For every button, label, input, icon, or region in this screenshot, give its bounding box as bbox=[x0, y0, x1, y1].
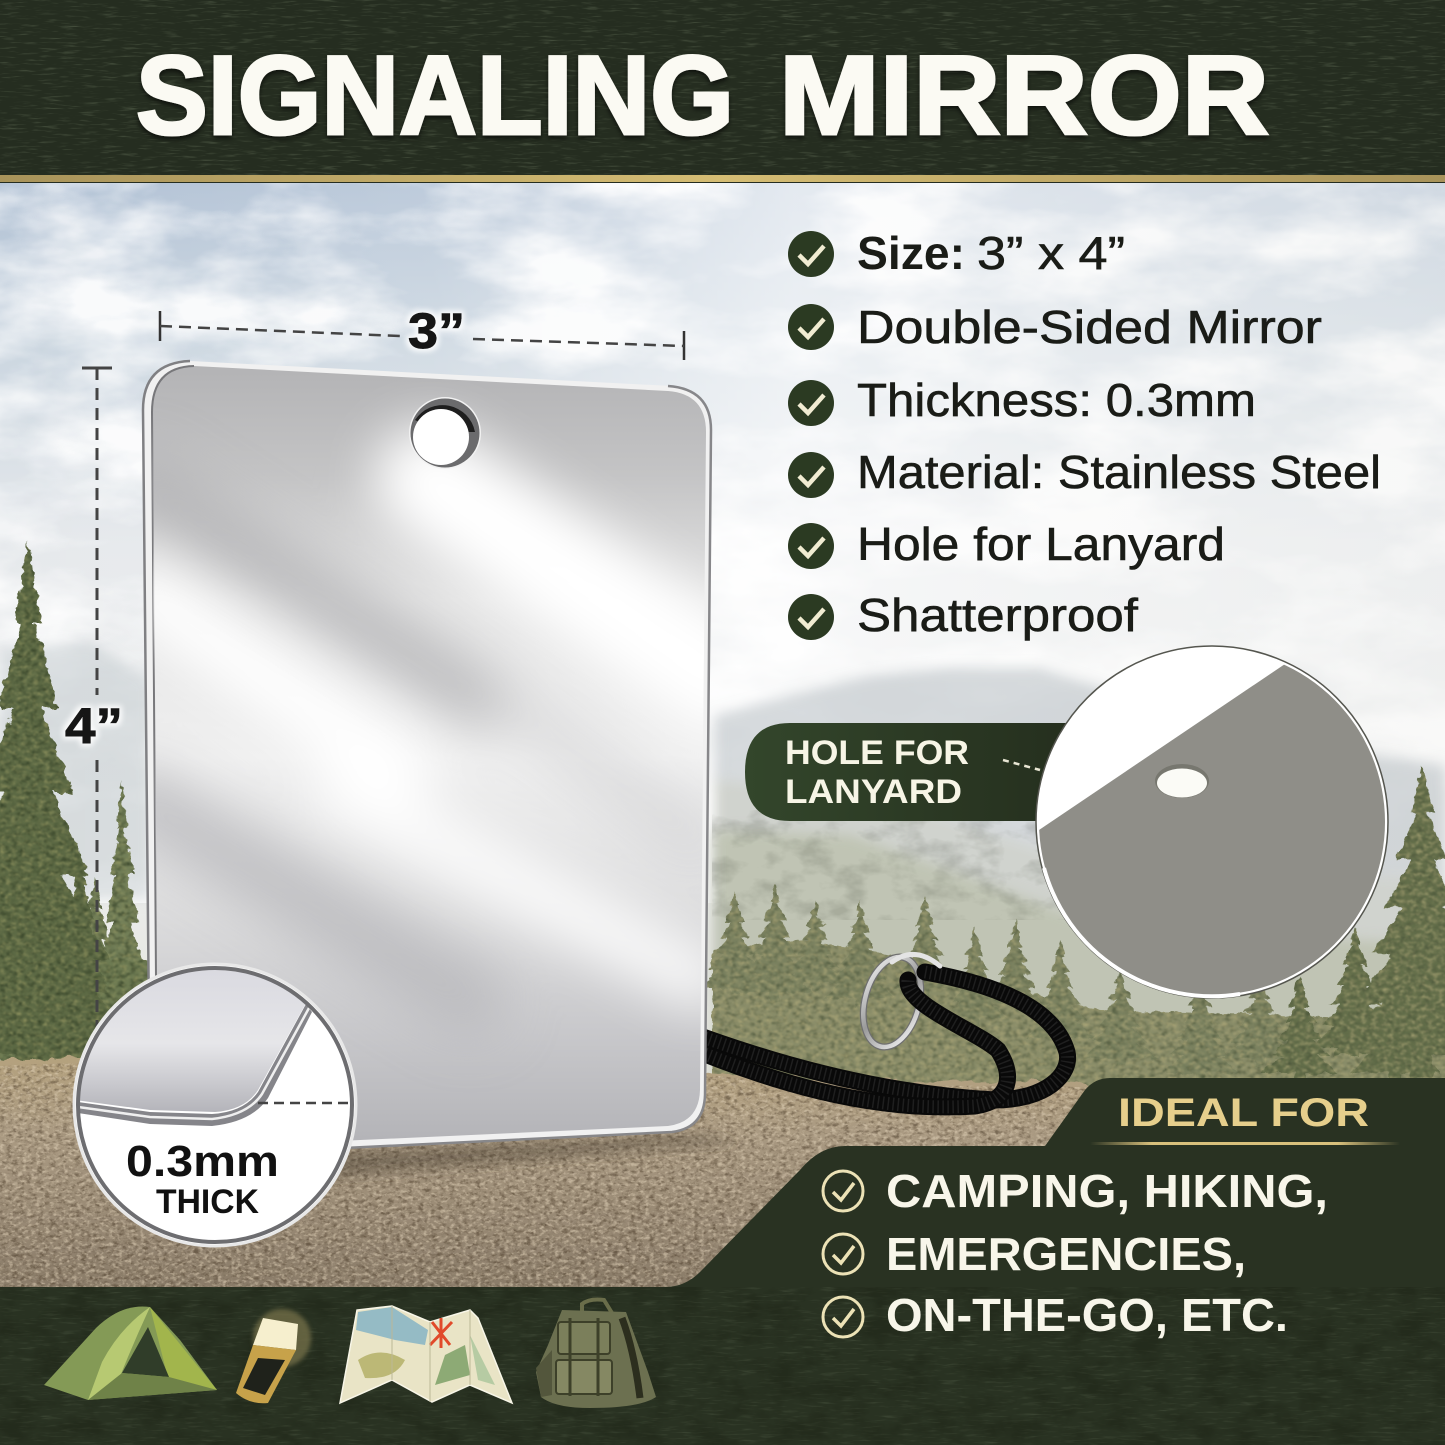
icon: tent bbox=[44, 1306, 217, 1400]
magnifier: thickness detail: THICK bbox=[156, 1183, 259, 1221]
lanyard hole bbox=[409, 397, 481, 469]
use: on the go: ON-THE-GO, ETC. bbox=[886, 1289, 1288, 1341]
use: emergencies: EMERGENCIES, bbox=[886, 1228, 1246, 1280]
item: size bbox=[788, 227, 1125, 279]
ideal for heading: IDEAL FOR bbox=[1118, 1091, 1369, 1135]
item: size: Size: bbox=[857, 227, 965, 279]
item: size: 3” x 4” bbox=[977, 227, 1125, 279]
icon: backpack bbox=[536, 1300, 656, 1408]
icon: folded map bbox=[340, 1306, 512, 1403]
ideal for heading bbox=[1090, 1091, 1400, 1145]
height dimension: 4 inches: 4” bbox=[65, 698, 123, 754]
ground path bbox=[0, 1054, 1088, 1287]
width dimension: 3 inches: 3” bbox=[408, 303, 465, 359]
width dimension: 3 inches bbox=[160, 303, 684, 360]
magnifier: thickness detail: 0.3mm bbox=[126, 1137, 279, 1186]
background: outdoor scene bbox=[0, 183, 1445, 1310]
magnifier: thickness detail bbox=[70, 960, 356, 1246]
item: double-sided: Double-Sided Mirror bbox=[857, 301, 1322, 353]
item: thickness: Thickness: 0.3mm bbox=[857, 374, 1256, 426]
lanyard cord and ring bbox=[700, 951, 1068, 1107]
icon: lantern bbox=[236, 1309, 311, 1403]
bottom dark band bbox=[0, 1078, 1445, 1445]
mirror plate bbox=[140, 361, 720, 1156]
left forest bbox=[0, 540, 164, 1096]
title: SIGNALING bbox=[136, 33, 734, 158]
mirror shadow bbox=[160, 1135, 740, 1180]
feature checklist bbox=[788, 227, 1381, 641]
use: camping: CAMPING, HIKING, bbox=[886, 1165, 1328, 1217]
item: material: Material: Stainless Steel bbox=[857, 446, 1381, 498]
callout: hole for lanyard: HOLE FOR bbox=[785, 734, 969, 772]
callout: hole for lanyard bbox=[745, 723, 1070, 821]
item: hole: Hole for Lanyard bbox=[857, 518, 1225, 570]
split ring bbox=[854, 951, 930, 1053]
title bbox=[136, 33, 1269, 158]
ideal for list bbox=[823, 1165, 1328, 1341]
title: MIRROR bbox=[779, 33, 1269, 158]
right forest bbox=[700, 765, 1445, 1090]
distant mountains bbox=[0, 642, 1445, 1000]
item: shatterproof: Shatterproof bbox=[857, 589, 1138, 641]
callout: hole for lanyard: LANYARD bbox=[785, 773, 962, 811]
header band bbox=[0, 0, 1445, 182]
magnifier: hole detail bbox=[1036, 646, 1400, 1010]
